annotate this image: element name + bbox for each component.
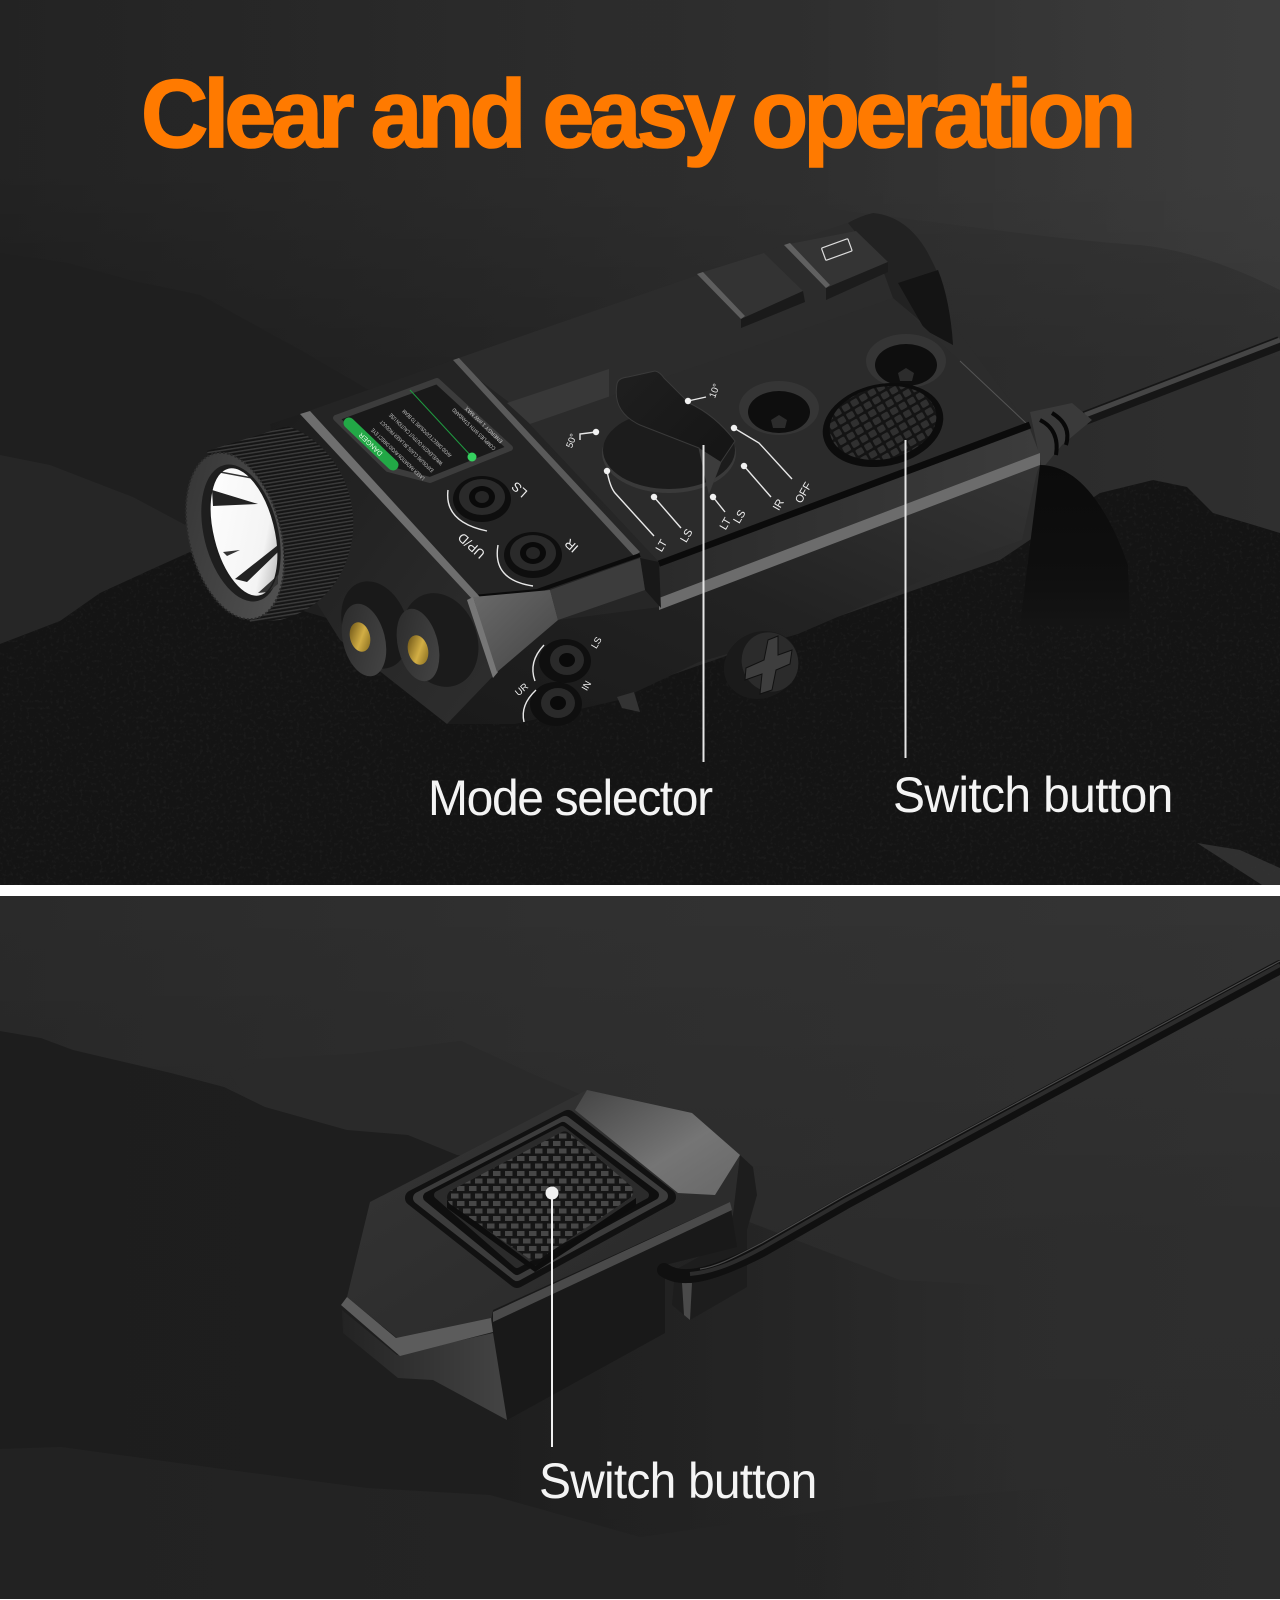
rail foot xyxy=(617,692,640,712)
danger pill: DANGER xyxy=(358,431,384,457)
title: Clear and easy operation xyxy=(141,60,1137,168)
side screws: LS xyxy=(589,635,605,651)
rear block xyxy=(672,1155,757,1320)
warning sticker: AVOID DIRECT EXPOSURE TO BEAM xyxy=(402,408,453,458)
50 degree marking xyxy=(564,429,599,450)
LT LS marking: LT xyxy=(718,516,734,532)
10 degree marking xyxy=(685,382,723,404)
label: switch button: Switch button xyxy=(893,768,1173,823)
LT marking xyxy=(604,468,670,554)
callout line: mode selector xyxy=(702,445,704,762)
adjuster labels: UP/D xyxy=(455,530,488,562)
selector knob xyxy=(602,371,736,493)
plate rear edge highlight xyxy=(960,361,1027,424)
laser barrel right xyxy=(389,582,491,698)
warning sticker: WAVELENGTH OUTPUT CAUTION USE xyxy=(388,411,444,466)
adjuster labels: LS xyxy=(508,479,530,501)
plate lower edge xyxy=(473,555,640,597)
callout: remote switch button xyxy=(546,1186,558,1447)
front bevel xyxy=(341,1297,493,1356)
textured switch pad xyxy=(447,1132,634,1260)
cable gland xyxy=(1030,403,1092,469)
label: remote switch button: Switch button xyxy=(539,1454,817,1509)
cable xyxy=(1085,340,1280,418)
mounting thumb screw xyxy=(713,619,809,711)
front facets xyxy=(473,558,645,672)
laser barrel left xyxy=(330,572,420,681)
label: mode selector: Mode selector xyxy=(428,771,713,826)
light edge strip xyxy=(659,453,1040,610)
warning sticker: EXPOSURE CLASS 3R LASER PRODUCT xyxy=(379,418,435,473)
10 degree marking: 10° xyxy=(707,382,723,400)
callout line: switch button xyxy=(904,440,906,758)
warning sticker: LASER RADIATION AVOID DIRECT EYE xyxy=(370,426,426,481)
device: remote pressure switch xyxy=(341,961,1280,1420)
device: laser flashlight unit xyxy=(170,213,1280,726)
right front edge xyxy=(493,1202,732,1322)
selector plate xyxy=(530,298,1027,562)
adjuster labels xyxy=(455,479,581,562)
IR marking: IR xyxy=(771,497,787,513)
bevel strip xyxy=(300,411,480,600)
selector screws xyxy=(739,334,946,435)
LT marking: LT xyxy=(654,538,670,554)
lower bevel strip xyxy=(467,597,498,678)
plate step xyxy=(507,369,609,424)
adjuster arcs xyxy=(448,490,533,586)
end block xyxy=(640,558,661,608)
side wall xyxy=(490,1202,737,1420)
switch button xyxy=(815,372,951,478)
side screws xyxy=(513,635,605,726)
OFF marking xyxy=(731,425,815,505)
seam strip xyxy=(453,358,640,556)
divider xyxy=(0,885,1280,896)
50 degree marking: 50° xyxy=(564,432,580,450)
panel: top background with mountains xyxy=(0,0,1280,885)
warning sticker: COMPLIES WITH STANDARD xyxy=(451,406,497,451)
bezel front ring xyxy=(170,442,300,630)
top surface xyxy=(347,1090,740,1338)
cable clip xyxy=(682,1283,692,1320)
groove xyxy=(659,425,1030,564)
front label plate xyxy=(300,360,637,597)
back top surface xyxy=(453,214,1027,562)
remote cable xyxy=(664,961,1280,1276)
adjuster screw IR xyxy=(504,532,562,578)
battery cover pad xyxy=(784,231,888,300)
pad underside xyxy=(447,1198,636,1272)
IR marking xyxy=(741,463,787,513)
adjuster screw LS xyxy=(453,476,511,522)
reflector xyxy=(198,460,290,604)
LS marking xyxy=(651,494,695,545)
rear end cap xyxy=(848,213,953,345)
side face xyxy=(659,429,1040,598)
rear light facet xyxy=(575,1090,740,1195)
LS marking: LS xyxy=(678,527,695,545)
side screws: UR xyxy=(513,681,531,699)
mode dial labels xyxy=(564,382,815,554)
front dark face xyxy=(270,414,497,724)
warning sticker xyxy=(336,381,510,481)
warning sticker: ENERGY 1 mW MAX xyxy=(464,405,504,444)
middle raised pad xyxy=(697,253,805,328)
danger pill xyxy=(349,423,393,465)
LT LS marking xyxy=(710,494,748,532)
shadow under body xyxy=(1020,465,1130,625)
LT LS marking: LS xyxy=(731,508,748,526)
lower skirt xyxy=(342,1310,507,1420)
OFF marking: OFF xyxy=(793,480,815,505)
lower body xyxy=(447,465,1040,724)
adjuster labels: IR xyxy=(561,536,581,556)
panel: bottom background with mountains xyxy=(0,896,1280,1600)
knurled flashlight bezel xyxy=(207,426,353,622)
side screws: IN xyxy=(580,679,594,693)
switch bezel rings xyxy=(413,1118,668,1280)
